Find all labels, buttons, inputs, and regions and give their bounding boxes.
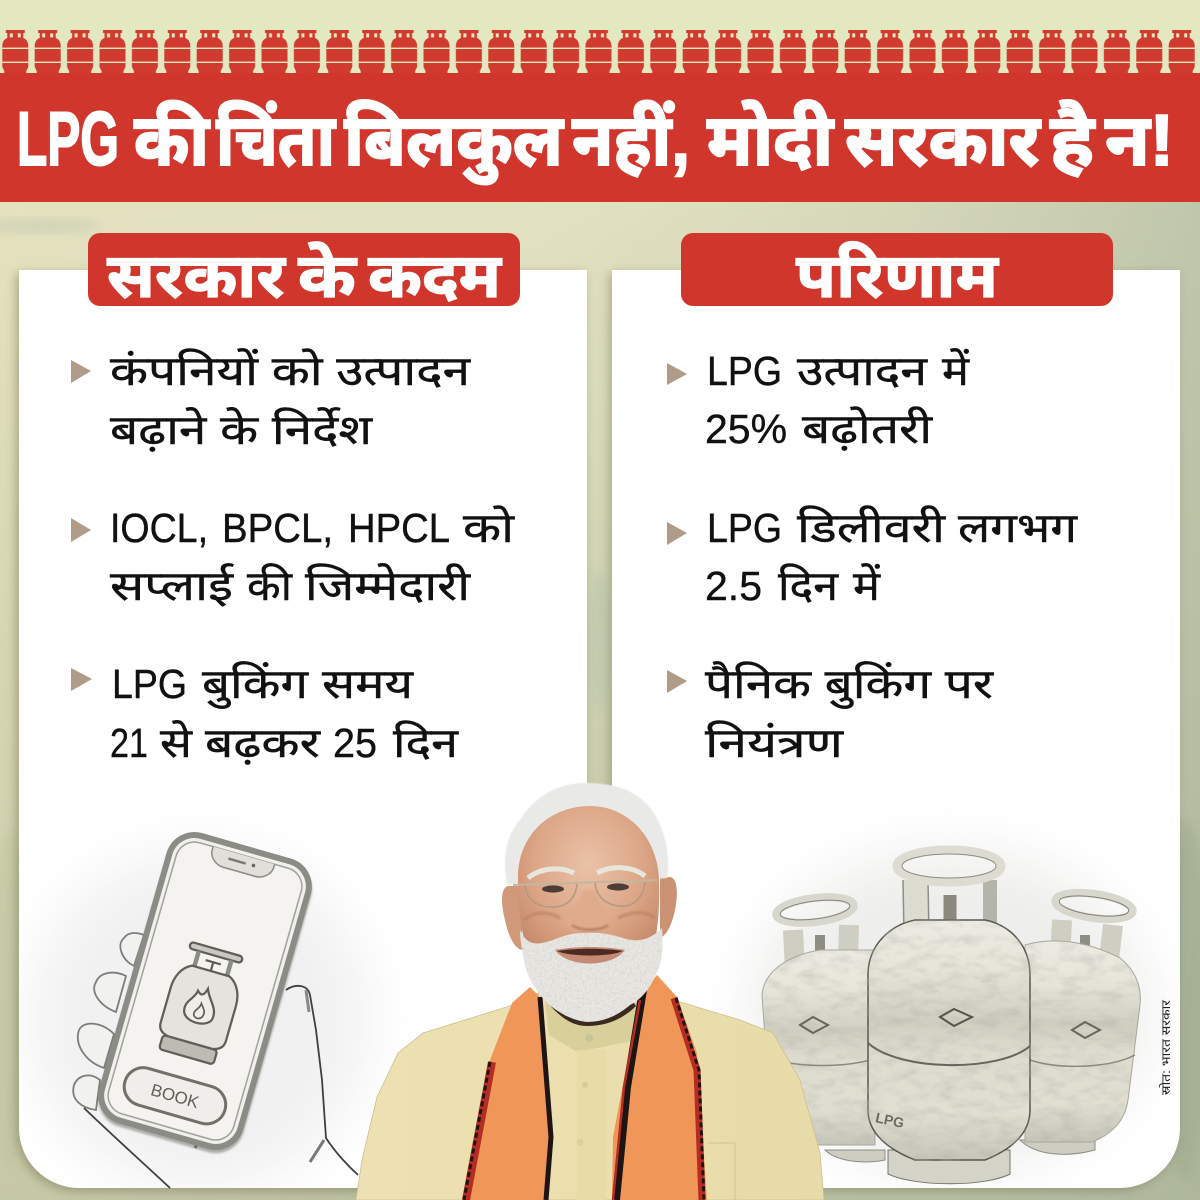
title banner (0, 73, 1200, 202)
bullet 3: 21 (110, 720, 148, 766)
bullet 3: 25 (333, 720, 377, 766)
bullet 3: बुकिंग (202, 661, 309, 709)
glasses (513, 880, 657, 907)
result 3 (667, 660, 994, 766)
illustration: LPG cylinders (762, 850, 1140, 1184)
result 2 (667, 505, 1078, 609)
panel: government steps (16, 233, 587, 1191)
title (17, 97, 1174, 185)
bullet 3: LPG (112, 661, 187, 707)
result 1: में (942, 348, 971, 394)
bullet 3: बढ़कर (205, 720, 321, 766)
bullet 2: IOCL, (110, 505, 208, 551)
result 2: डिलीवरी (797, 505, 947, 551)
center cylinder (868, 850, 1030, 1184)
title: सरकार (845, 101, 1041, 181)
cylinder pattern border (0, 30, 1200, 74)
phone (94, 829, 316, 1156)
right cylinder (1020, 889, 1140, 1154)
bullet 2: सप्लाई (110, 563, 234, 609)
bullet 2: को (463, 505, 516, 551)
face (518, 806, 659, 975)
bullet 3: समय (322, 661, 414, 707)
result 2: में (853, 563, 882, 609)
beard (520, 928, 663, 1022)
result 2: लगभग (958, 505, 1078, 551)
hand (73, 933, 358, 1188)
book button (120, 1063, 230, 1128)
heading pill: steps: कदम (368, 242, 503, 311)
book button: BOOK (149, 1080, 202, 1112)
title: न! (1105, 101, 1174, 181)
result 2: LPG (707, 505, 782, 551)
title: बिलकुल (344, 100, 565, 185)
nose and cheek shading (524, 890, 655, 930)
source credit: स्रोत: भारत सरकार (1158, 999, 1173, 1095)
result 1: बढ़ोतरी (802, 406, 934, 452)
heading pill: results (681, 233, 1113, 311)
ears (502, 886, 522, 950)
bullet 1 (71, 348, 471, 453)
illustration: hand holding phone (73, 829, 358, 1188)
title: LPG (17, 97, 119, 182)
collar and placket (545, 1000, 640, 1052)
bullet 1: बढ़ाने के निर्देश (110, 406, 373, 453)
center cylinder: LPG (874, 1109, 906, 1131)
bullet 3: दिन (393, 720, 459, 766)
result 1: LPG (707, 348, 782, 394)
title: मोदी (707, 100, 835, 181)
phone cylinder icon (154, 940, 250, 1066)
result 3: नियंत्रण (705, 720, 845, 766)
title: नहीं, (572, 100, 690, 181)
title: की (134, 100, 211, 181)
heading pill: steps: के (298, 240, 358, 311)
bullet 3 (71, 661, 459, 766)
bullet 2: जिम्मेदारी (305, 562, 472, 609)
bullet 2: की (247, 563, 293, 609)
result 1: 25% (705, 406, 787, 452)
portrait of Modi (356, 783, 824, 1200)
title: है (1050, 100, 1095, 181)
left cylinder (762, 893, 885, 1162)
scarf right (612, 975, 707, 1200)
bullet 1: कंपनियों को उत्पादन (110, 348, 471, 394)
hair (505, 783, 668, 885)
bullet 3: से (160, 719, 193, 766)
title: चिंता (216, 100, 337, 181)
result 1: उत्पादन (797, 348, 928, 394)
panel: results (609, 233, 1180, 1191)
result 3: पैनिक बुकिंग पर (705, 660, 994, 709)
mouth (555, 947, 625, 964)
result 2: 2.5 (705, 563, 762, 609)
result 1 (667, 348, 971, 452)
result 2: दिन (778, 563, 839, 609)
heading pill: steps: सरकार (107, 242, 287, 311)
neck shadow (548, 990, 636, 1026)
kurta (356, 990, 824, 1200)
eyes and brows (528, 868, 645, 893)
heading pill: steps (88, 233, 520, 311)
bullet 2 (71, 505, 516, 609)
scarf left (462, 987, 552, 1200)
bullet 2: HPCL (348, 505, 450, 551)
heading pill: results: परिणाम (796, 241, 1000, 311)
bullet 2: BPCL, (222, 505, 333, 551)
